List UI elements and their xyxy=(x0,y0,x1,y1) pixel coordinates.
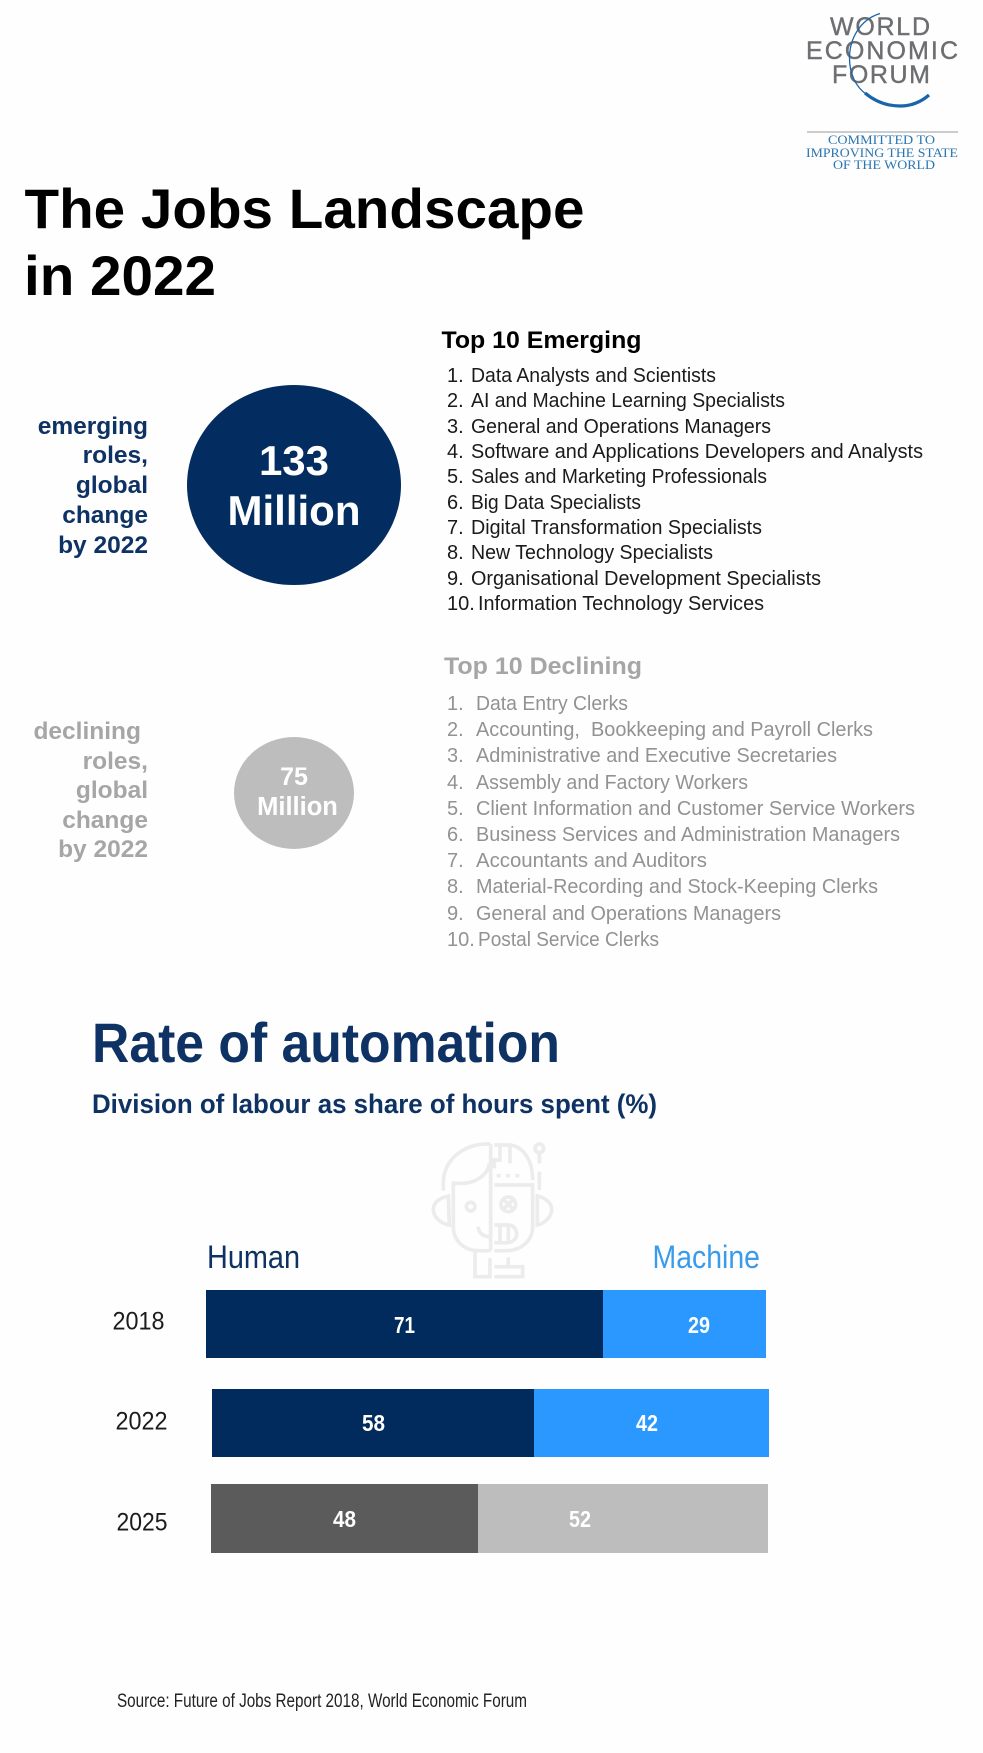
list: top 10 emerging: 6. xyxy=(447,492,464,514)
title: The Jobs Landscape xyxy=(24,177,584,240)
list: top 10 emerging: Sales and Marketing Professionals xyxy=(471,466,767,488)
bar: 2018 xyxy=(112,1290,766,1358)
label: emerging roles: by 2022 xyxy=(58,532,148,559)
list: top 10 declining xyxy=(444,653,915,951)
subheading: division of labour: Division of labour as share of hours spent (%) xyxy=(92,1089,657,1119)
list: top 10 emerging: 10. xyxy=(447,593,475,615)
label: emerging roles: roles, xyxy=(83,442,148,469)
list: top 10 emerging: 4. xyxy=(447,441,464,463)
logo: World Economic Forum: IMPROVING THE STATE xyxy=(806,146,958,160)
list: top 10 declining: 2. xyxy=(447,719,464,741)
list: top 10 declining: Data Entry Clerks xyxy=(476,693,628,715)
list: top 10 emerging: 5. xyxy=(447,466,464,488)
list: top 10 declining: General and Operations Managers xyxy=(476,903,781,925)
list: top 10 declining: Accountants and Auditors xyxy=(476,850,707,872)
list: top 10 emerging: 8. xyxy=(447,542,464,564)
list: top 10 emerging: 1. xyxy=(447,365,464,387)
list: top 10 declining: Client Information and Customer Service Workers xyxy=(476,798,915,820)
list: top 10 declining: Business Services and Administration Managers xyxy=(476,824,900,846)
bar: 2022: 58 xyxy=(362,1410,385,1436)
title: in 2022 xyxy=(24,244,216,307)
bar: 2022: 2022 xyxy=(116,1408,168,1436)
legend: human: Human xyxy=(207,1239,300,1275)
legend: machine: Machine xyxy=(652,1239,760,1275)
logo: World Economic Forum xyxy=(806,13,958,172)
bar chart xyxy=(112,1290,769,1553)
label: declining roles: by 2022 xyxy=(58,836,148,863)
circle: 133 million emerging xyxy=(187,385,401,585)
list: top 10 declining: Postal Service Clerks xyxy=(478,929,659,951)
list: top 10 emerging xyxy=(442,327,923,615)
list: top 10 declining: Material-Recording and Stock-Keeping Clerks xyxy=(476,876,878,898)
list: top 10 declining: 6. xyxy=(447,824,464,846)
circle: 75 million declining: 75 xyxy=(280,763,308,791)
list: top 10 declining: 1. xyxy=(447,693,464,715)
list: top 10 declining: Top 10 Declining xyxy=(444,653,642,680)
list: top 10 declining: 3. xyxy=(447,745,464,767)
source note: Source: Future of Jobs Report 2018, World Economic Forum xyxy=(117,1691,527,1712)
label: declining roles xyxy=(33,718,148,863)
logo: World Economic Forum: FORUM xyxy=(832,61,930,89)
logo: World Economic Forum: COMMITTED TO xyxy=(828,133,935,147)
list: top 10 emerging: 3. xyxy=(447,416,464,438)
bar: 2018: 2018 xyxy=(112,1308,164,1336)
bar: 2025: 52 xyxy=(569,1506,591,1532)
circle: 133 million emerging: Million xyxy=(228,487,360,534)
list: top 10 emerging: 2. xyxy=(447,390,464,412)
circle: 75 million declining xyxy=(234,737,354,849)
list: top 10 emerging: Digital Transformation Specialists xyxy=(471,517,762,539)
list: top 10 emerging: 9. xyxy=(447,568,464,590)
list: top 10 declining: Accounting, Bookkeeping and Payroll Clerks xyxy=(476,719,873,741)
icon: half human half robot head xyxy=(433,1144,552,1277)
list: top 10 declining: 7. xyxy=(447,850,464,872)
label: declining roles: declining xyxy=(33,718,141,745)
list: top 10 emerging: Top 10 Emerging xyxy=(442,327,642,354)
list: top 10 emerging: Big Data Specialists xyxy=(471,492,641,514)
heading: rate of automation: Rate of automation xyxy=(92,1011,560,1074)
list: top 10 declining: 5. xyxy=(447,798,464,820)
bar: 2022 xyxy=(116,1389,769,1457)
list: top 10 emerging: New Technology Specialists xyxy=(471,542,713,564)
bar: 2025 xyxy=(116,1484,768,1553)
bar: 2025: 2025 xyxy=(116,1508,168,1536)
bar: 2022: 42 xyxy=(636,1410,658,1436)
list: top 10 emerging: General and Operations Managers xyxy=(471,416,771,438)
logo: World Economic Forum: WORLD xyxy=(830,13,930,41)
list: top 10 declining: 10. xyxy=(447,929,475,951)
list: top 10 declining: Assembly and Factory Workers xyxy=(476,772,748,794)
list: top 10 declining: 4. xyxy=(447,772,464,794)
circle: 75 million declining: Million xyxy=(257,793,338,821)
label: emerging roles: global xyxy=(76,472,148,499)
label: declining roles: roles, xyxy=(83,748,148,775)
list: top 10 declining: 9. xyxy=(447,903,464,925)
label: emerging roles: emerging xyxy=(38,413,148,440)
title xyxy=(24,177,584,307)
list: top 10 declining: Administrative and Executive Secretaries xyxy=(476,745,837,767)
list: top 10 emerging: Software and Applications Developers and Analysts xyxy=(471,441,923,463)
label: emerging roles xyxy=(38,413,148,559)
list: top 10 emerging: Information Technology Services xyxy=(478,593,764,615)
logo: World Economic Forum: OF THE WORLD xyxy=(833,158,935,172)
label: declining roles: change xyxy=(62,807,148,834)
circle: 133 million emerging: 133 xyxy=(259,437,329,484)
logo: World Economic Forum: ECONOMIC xyxy=(806,37,958,65)
list: top 10 emerging: AI and Machine Learning Specialists xyxy=(471,390,785,412)
label: emerging roles: change xyxy=(62,502,148,529)
list: top 10 emerging: Organisational Development Specialists xyxy=(471,568,821,590)
list: top 10 emerging: Data Analysts and Scientists xyxy=(471,365,716,387)
bar: 2025: 48 xyxy=(333,1506,356,1532)
label: declining roles: global xyxy=(76,777,148,804)
bar: 2018: 29 xyxy=(688,1312,710,1338)
list: top 10 emerging: 7. xyxy=(447,517,464,539)
bar: 2018: 71 xyxy=(394,1312,415,1338)
list: top 10 declining: 8. xyxy=(447,876,464,898)
